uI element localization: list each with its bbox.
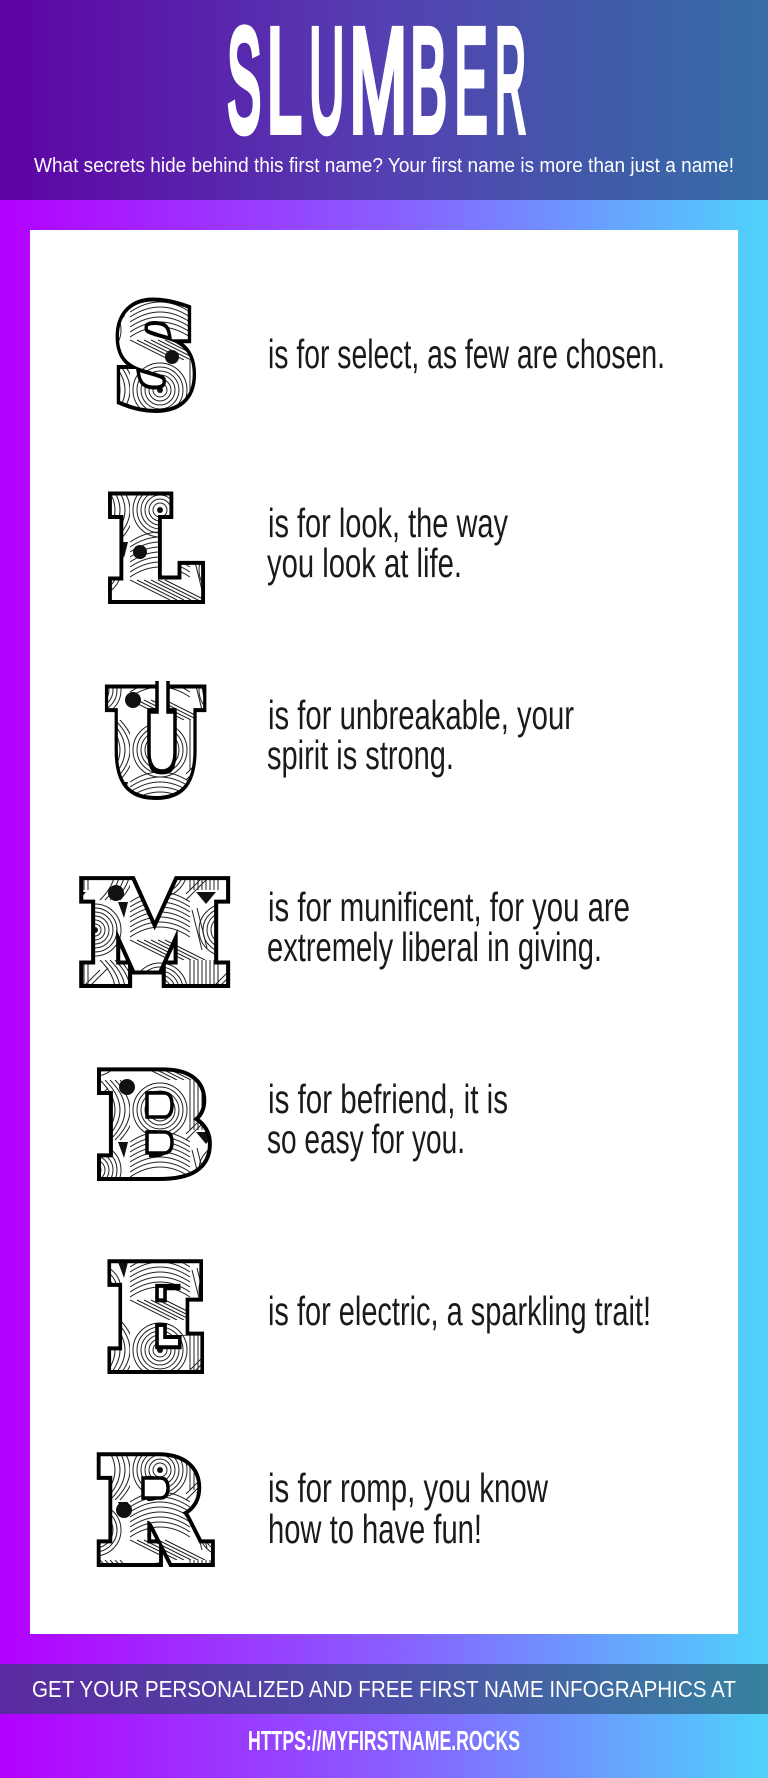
text: L lines: you look at life.: [267, 540, 462, 586]
icon: letter L: L: [112, 476, 198, 624]
row R: [100, 1435, 548, 1588]
footer band: [0, 1664, 768, 1714]
icon: letter S: S: [117, 283, 194, 431]
header band: R: [495, 0, 526, 163]
text: B lines: so easy for you.: [267, 1116, 465, 1162]
icon: letter B: B: [101, 1052, 209, 1202]
row B: [101, 1052, 508, 1202]
icon: letter R: R: [100, 1435, 205, 1588]
title: U: [309, 0, 344, 163]
text: U lines: spirit is strong.: [267, 732, 454, 778]
text: R lines: how to have fun!: [268, 1506, 482, 1552]
text: M lines: extremely liberal in giving.: [267, 924, 602, 970]
icon: letter R: R: [100, 1435, 205, 1588]
icon: letter E: E: [111, 1242, 201, 1395]
row L: [112, 476, 508, 624]
title: M: [349, 0, 407, 163]
row S: [117, 283, 665, 431]
title: E: [454, 0, 488, 163]
icon: letter M: M: [84, 860, 226, 1008]
title: S: [227, 0, 261, 163]
subtitle: What secrets hide behind this first name? Your first name is more than just a name!: [34, 155, 734, 177]
icon: letter L: L: [112, 476, 198, 624]
footer url: HTTPS://MYFIRSTNAME.ROCKS: [248, 1725, 520, 1756]
text: B lines: is for befriend, it is: [268, 1076, 508, 1122]
header band: [0, 0, 768, 200]
title: L: [267, 0, 302, 163]
text: U lines: is for unbreakable, your: [268, 692, 574, 738]
icon: letter E: E: [111, 1242, 201, 1395]
row U: [110, 669, 574, 819]
title: B: [410, 0, 447, 163]
text: R lines: is for romp, you know: [268, 1465, 548, 1511]
icon: letter U: U: [110, 669, 200, 819]
icon: letter B: B: [101, 1052, 209, 1202]
icon: letter M: M: [84, 860, 226, 1008]
row M: [84, 860, 630, 1008]
icon: letter S: S: [117, 283, 194, 431]
text: L lines: is for look, the way: [268, 500, 508, 546]
row E: [111, 1242, 651, 1395]
icon: letter U: U: [110, 669, 200, 819]
text: M lines: is for munificent, for you are: [268, 884, 630, 930]
panel: white content card: [30, 230, 738, 1634]
